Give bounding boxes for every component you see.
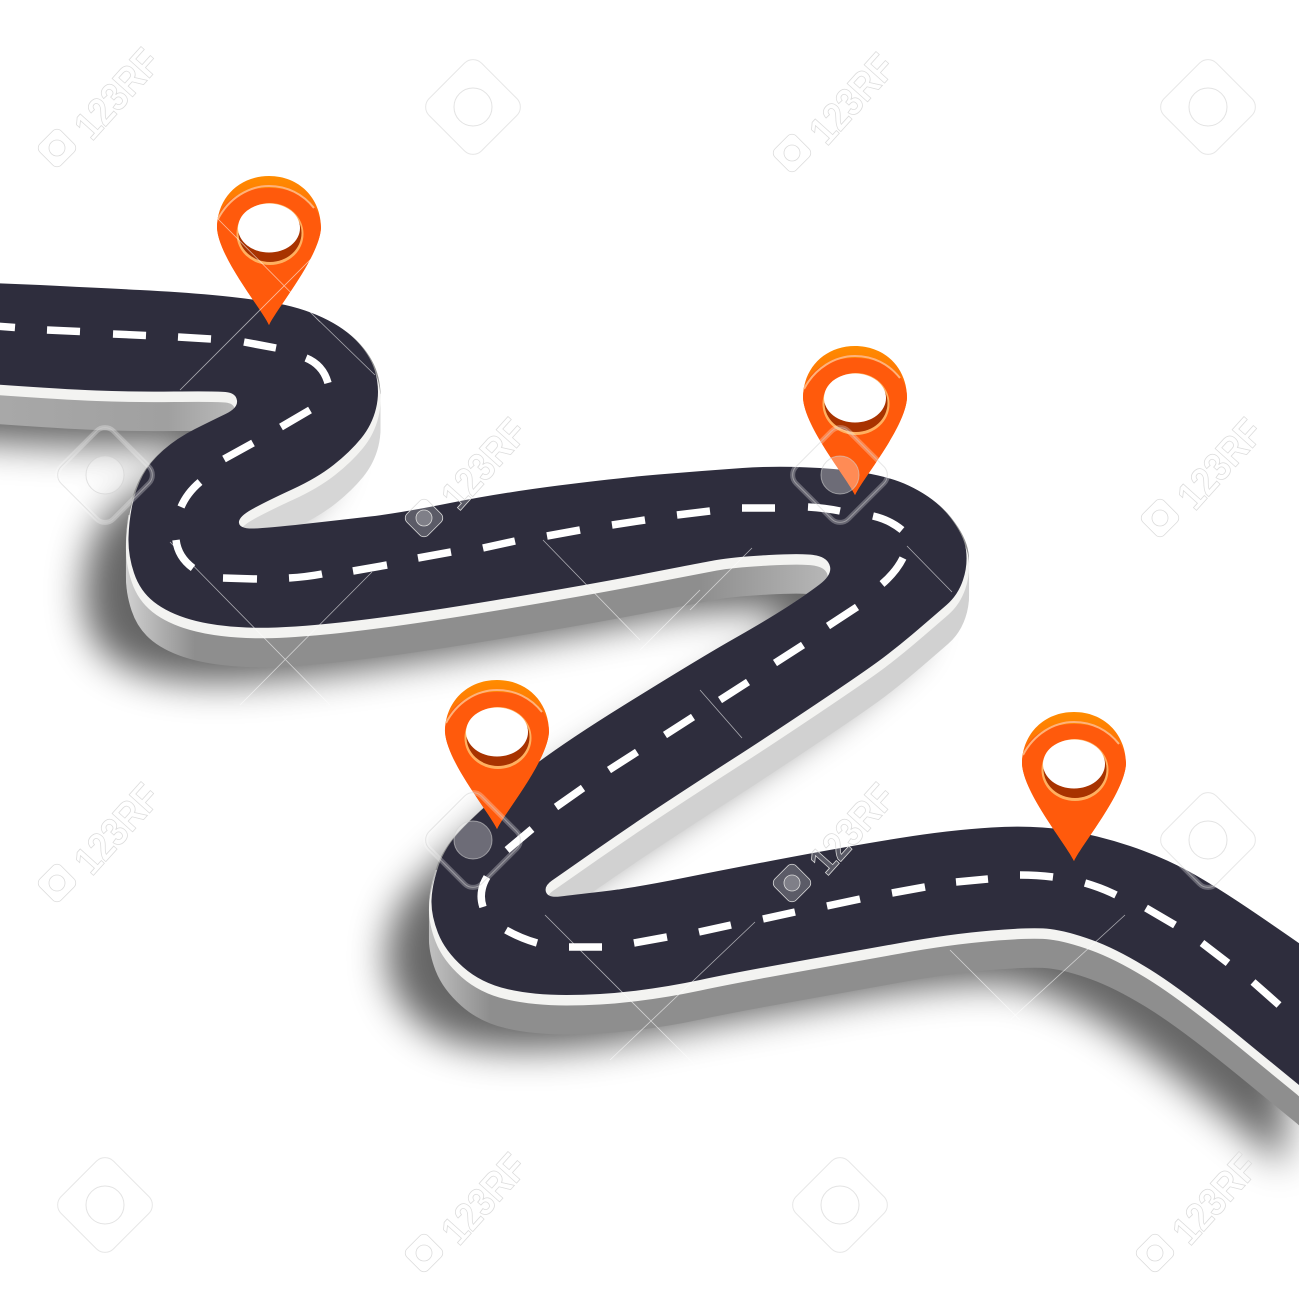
watermark: 123RF logos: 123RF bbox=[433, 411, 536, 518]
road shadow bbox=[0, 338, 1285, 1167]
road side wall bbox=[0, 320, 1299, 1126]
watermark: 123RF logos: 123RF bbox=[801, 776, 904, 883]
watermark: 123RF logos: 123RF bbox=[1164, 1146, 1267, 1253]
road surface bbox=[0, 283, 1299, 1112]
watermark: 123RF logos: 123RF bbox=[433, 1146, 536, 1253]
pin 4 bbox=[1022, 712, 1126, 861]
pin 2 bbox=[803, 346, 907, 495]
road white edge bbox=[0, 291, 1299, 1120]
road centre dashes bbox=[0, 326, 1279, 1005]
pin 1 bbox=[217, 176, 321, 325]
watermark: 123RF logos: 123RF bbox=[1169, 411, 1272, 518]
watermark: 123RF logos: 123RF bbox=[801, 46, 904, 153]
watermark: 123RF logos: 123RF bbox=[66, 41, 169, 148]
pin 3 bbox=[445, 680, 549, 829]
watermark: 123RF logos: 123RF bbox=[66, 776, 169, 883]
watermark hairlines bbox=[170, 218, 1125, 1070]
